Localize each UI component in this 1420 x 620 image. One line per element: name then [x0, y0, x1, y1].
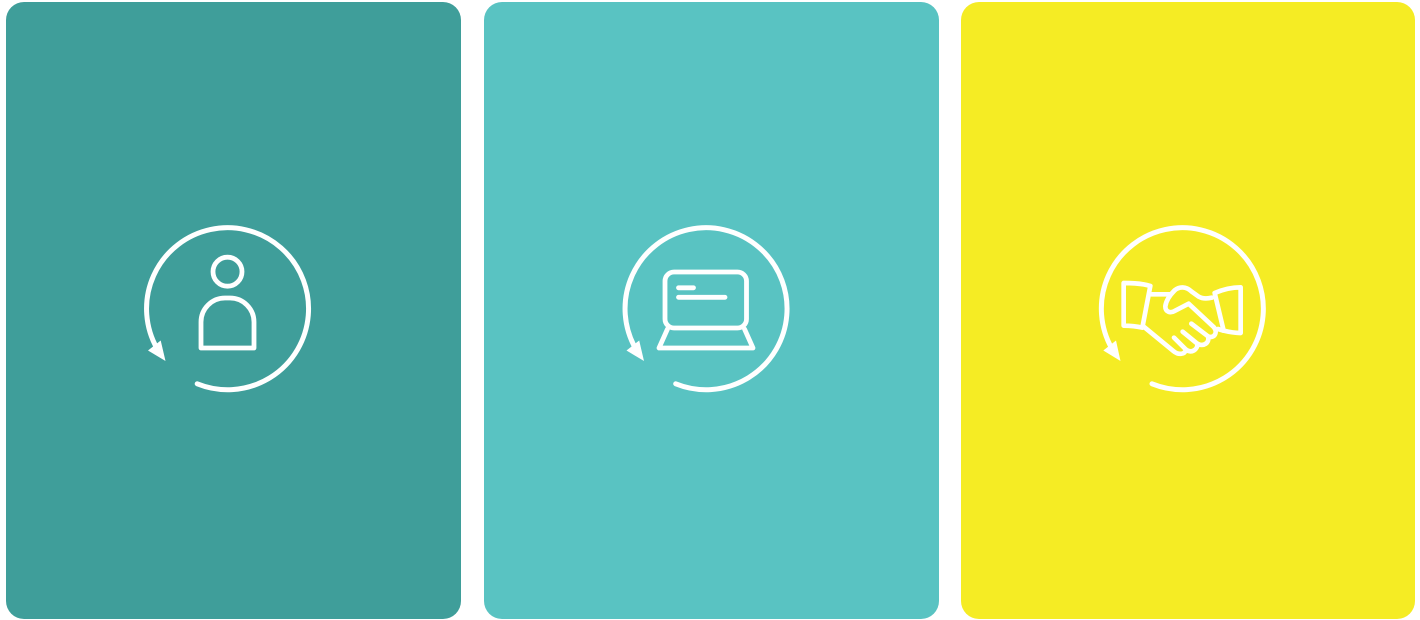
icon: circular arrow around handshake [1101, 228, 1263, 390]
icon: handshake [1124, 283, 1241, 354]
icon: circular arrow around laptop [625, 228, 787, 390]
icon: person [201, 257, 254, 348]
panel: laptop [484, 2, 939, 619]
panel background: yellow [961, 2, 1415, 619]
panel: person [6, 2, 461, 619]
panel background: dark teal [6, 2, 461, 619]
panel background: light teal [484, 2, 939, 619]
icon: laptop [659, 272, 753, 348]
panel: handshake [961, 2, 1415, 619]
icon: circular arrow around person [147, 228, 309, 390]
